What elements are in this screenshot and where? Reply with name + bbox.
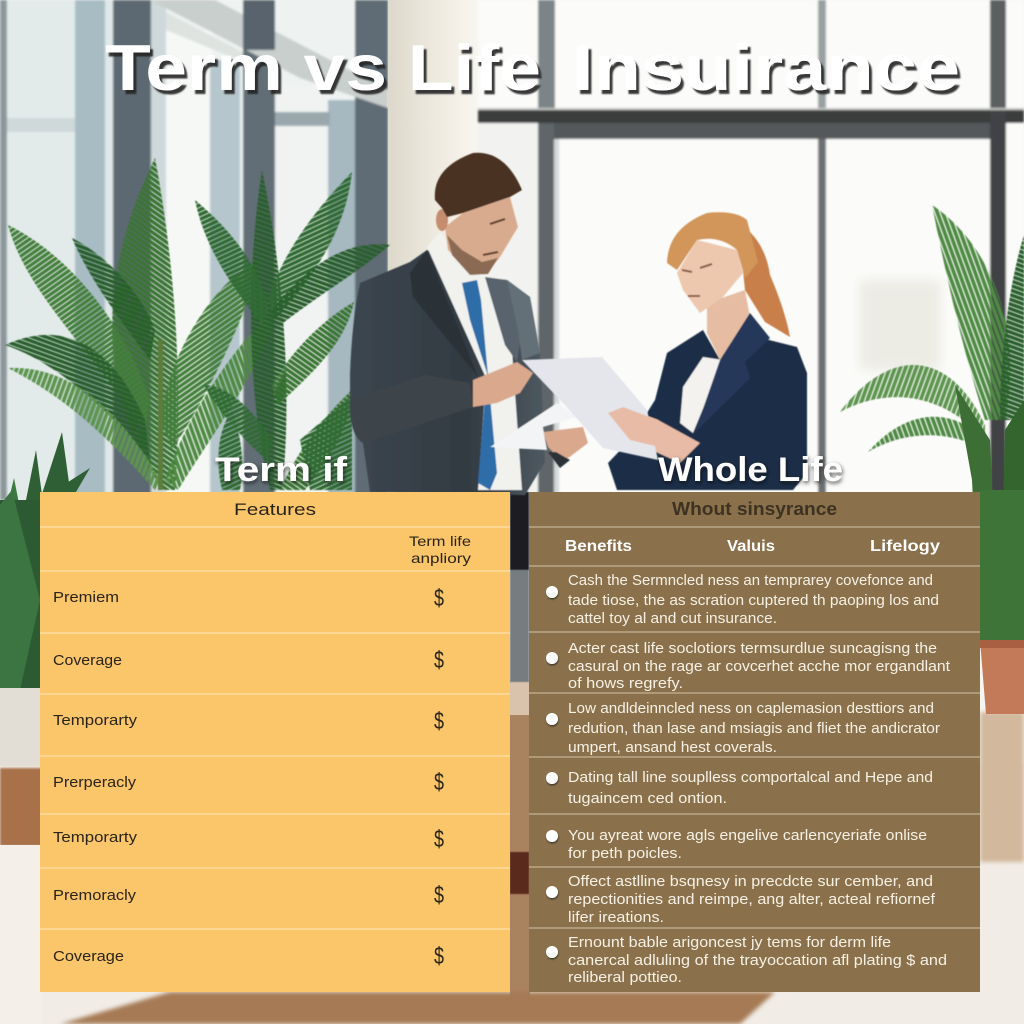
plant: right palm <box>840 205 1024 714</box>
row: temporarty: $ <box>434 826 444 853</box>
title: Insuirance <box>572 31 960 104</box>
table header: features: Features <box>234 500 316 519</box>
column headers: Lifelogy <box>870 538 940 555</box>
row 5 <box>546 827 927 862</box>
row 4 <box>546 769 933 807</box>
plant: left fern <box>5 158 278 490</box>
row 7 <box>546 934 947 986</box>
row 3: umpert, ansand hest coverals. <box>568 739 777 756</box>
row: coverage: $ <box>434 647 444 674</box>
heading: whole life: Whole Life <box>658 451 843 489</box>
man sleeve <box>350 375 473 443</box>
man hand <box>473 362 533 407</box>
woman face <box>677 240 743 313</box>
man eye and mouth <box>483 219 505 255</box>
row 5: You ayreat wore agls engelive carlencyeriafe onlise <box>568 827 927 844</box>
title <box>105 31 960 104</box>
plant: centre palm <box>195 170 390 490</box>
pillar <box>388 0 478 500</box>
woman lapel <box>695 313 770 432</box>
column headers: Benefits <box>565 538 632 555</box>
row 6: lifer ireations. <box>568 909 664 926</box>
row 7: canercal adluling of the trayoccation afl plating $ and <box>568 952 947 969</box>
man ear <box>436 209 448 231</box>
row 3: Low andldeinncled ness on caplemasion desttiors and <box>568 700 934 717</box>
woman <box>608 212 807 490</box>
heading: term life: Term if <box>215 451 348 489</box>
row 2: Acter cast life soclotiors termsurdlue suncagisng the <box>568 640 937 657</box>
woman eye and mouth <box>682 264 712 296</box>
row 6: repectionities and reimpe, ang alter, acteal refiornef <box>568 891 936 908</box>
row: coverage <box>53 647 444 674</box>
man legs <box>510 492 529 570</box>
row 1: Cash the Sermncled ness an temprarey covefonce and <box>568 572 933 589</box>
row 3 <box>546 700 940 756</box>
row: premoracly <box>53 882 444 909</box>
row: temporarty <box>53 826 444 853</box>
man hair <box>435 153 522 217</box>
row: temporarty <box>53 708 444 735</box>
row 2: of hows regrefy. <box>568 675 683 692</box>
row: premium: $ <box>434 585 444 612</box>
man right jacket panel <box>507 280 540 360</box>
column header: term life: anpliory <box>411 550 471 566</box>
row 2: casural on the rage ar covcerhet acche mor ergandlant <box>568 658 951 675</box>
man tie <box>462 280 497 490</box>
pot: bottom-left <box>0 688 40 766</box>
man beard shadow <box>447 235 498 275</box>
row: prerperacly: $ <box>434 769 444 796</box>
right windows <box>478 0 1024 510</box>
documents <box>490 357 672 460</box>
row: temporarty: $ <box>434 708 444 735</box>
floor <box>0 680 1024 1024</box>
row 6: Offect astlline bsqnesy in precdcte sur cember, and <box>568 873 933 890</box>
row: premoracly: Premoracly <box>53 887 137 904</box>
column header: term life <box>409 533 471 566</box>
column headers: Valuis <box>727 538 775 555</box>
row 7: Ernount bable arigoncest jy tems for derm life <box>568 934 891 951</box>
row: premium: Premiem <box>53 589 119 606</box>
row 4: tugaincem ced ontion. <box>568 790 727 807</box>
woman blazer <box>608 313 807 490</box>
row 7: reliberal pottieo. <box>568 969 682 986</box>
row: premoracly: $ <box>434 882 444 909</box>
row: temporarty: Temporarty <box>53 829 138 846</box>
row 2 <box>546 640 951 692</box>
woman hair <box>667 212 758 278</box>
man neck and head <box>445 197 518 273</box>
man shirt <box>427 232 522 490</box>
row 1 <box>546 572 939 627</box>
row 1: cattel toy al and cut insurance. <box>568 610 777 627</box>
row: coverage: $ <box>434 943 444 970</box>
man lapels <box>410 250 478 377</box>
man <box>350 153 588 894</box>
row: coverage: Coverage <box>53 652 122 669</box>
panel: whole life table <box>529 492 980 992</box>
row 3: redution, than lase and msiagis and fliet the andicrator <box>568 720 940 737</box>
row: premium <box>53 585 444 612</box>
row: prerperacly <box>53 769 444 796</box>
row: temporarty: Temporarty <box>53 712 138 729</box>
row: prerperacly: Prerperacly <box>53 774 137 791</box>
row 6 <box>546 873 936 926</box>
title: Term vs Life <box>105 31 541 104</box>
table header: without insurance: Whout sinsyrance <box>672 499 837 519</box>
row: coverage <box>53 943 444 970</box>
man jacket <box>350 250 545 495</box>
column headers <box>565 538 940 555</box>
woman blouse <box>680 357 723 433</box>
row 1: tade tiose, the as scration cuptered th paoping los and <box>568 592 939 609</box>
row 5: for peth poicles. <box>568 845 682 862</box>
row 4: Dating tall line souplless comportalcal and Hepe and <box>568 769 933 786</box>
woman neck <box>707 290 750 360</box>
panel: term life table <box>40 492 510 992</box>
left window wall <box>0 0 388 500</box>
woman hand <box>608 407 700 463</box>
column header: term life: Term life <box>409 533 471 549</box>
man lower hand <box>543 427 588 462</box>
row: coverage: Coverage <box>53 948 124 965</box>
plant: bottom-left <box>0 432 90 690</box>
woman ponytail <box>738 222 790 337</box>
